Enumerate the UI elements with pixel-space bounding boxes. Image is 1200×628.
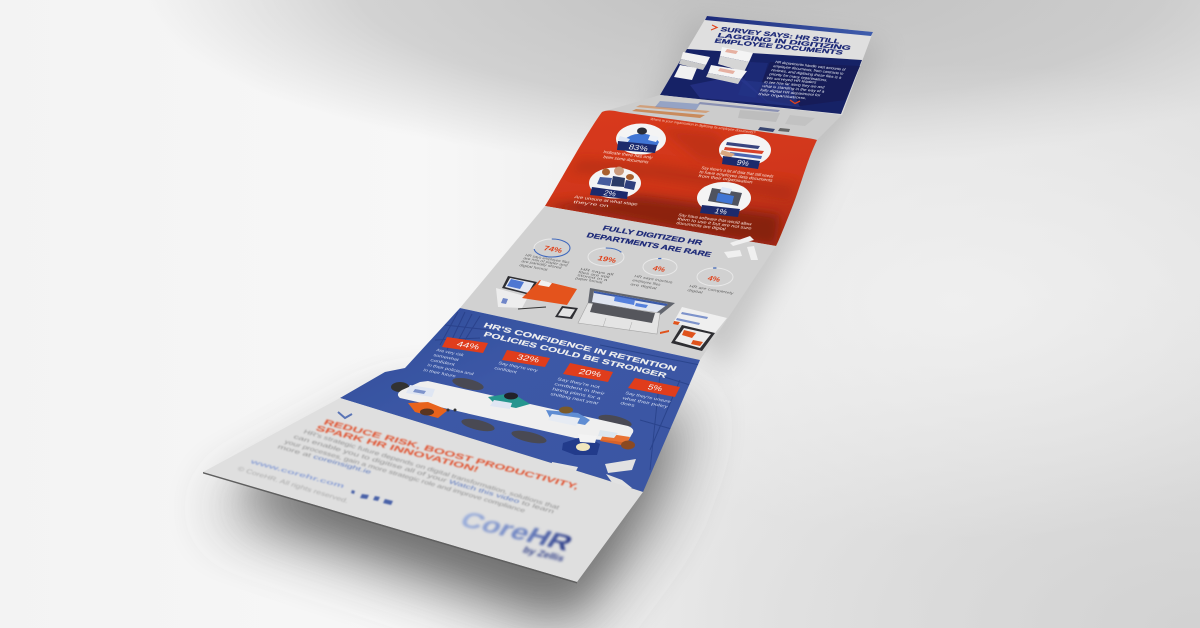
- icon: paper stacks: [674, 47, 753, 84]
- heading: POLICIES COULD BE STRONGER: [482, 331, 668, 380]
- heading: FULLY DIGITIZED HR: [601, 225, 703, 247]
- stat: 83 percent: been some documents: [603, 154, 650, 164]
- stat: 1 percent: Say have software that would allow: [678, 212, 753, 226]
- paragraph text: reviews, and digitising these files is a: [771, 68, 842, 80]
- ring: 4 percent complete: 4%: [706, 275, 721, 284]
- panel: fold strip: [602, 95, 842, 140]
- body copy: your processes, gain a more strategic role and improve compliance: [283, 439, 526, 514]
- ring: 4 percent complete: digital: [687, 288, 704, 295]
- folded paper infographic: [203, 16, 873, 584]
- stat: 5 percent: what their policy: [622, 395, 669, 409]
- ring: 4 percent active: employee files: [632, 278, 662, 287]
- ring: 19 percent: stored in a: [577, 273, 609, 282]
- heading: HR'S CONFIDENCE IN RETENTION: [482, 322, 678, 373]
- paragraph text: fully digital HR department for: [760, 88, 822, 97]
- panel: header: [660, 16, 873, 115]
- stat: 83 percent: 83%: [627, 142, 650, 153]
- ring: 4 percent active: 4%: [651, 265, 666, 274]
- person: blue shirt: [546, 406, 590, 426]
- panel: retention confidence: [340, 308, 700, 492]
- paragraph text: HR departments handle vast amounts of: [775, 60, 846, 72]
- ring: 19 percent: HR says all: [580, 267, 615, 277]
- stat: 5 percent: 5%: [646, 382, 665, 393]
- stat: 1 percent: [676, 182, 754, 231]
- stat: 83 percent: Indicate there has only: [603, 149, 655, 160]
- call to action heading: REDUCE RISK, BOOST PRODUCTIVITY,: [322, 418, 581, 491]
- ring: 19 percent: 19%: [596, 255, 617, 265]
- person: navy foreground: [562, 430, 635, 455]
- body copy: HR's strategic future depends on digital transformation, solutions that: [302, 429, 561, 511]
- paragraph text: We surveyed HR leaders: [766, 76, 817, 84]
- stat: 20 percent: [550, 363, 613, 406]
- stat: 1 percent: 1%: [713, 206, 729, 216]
- stat: 1 percent: them to use it but are not sure: [677, 216, 754, 231]
- paper shadow: [215, 20, 885, 628]
- paragraph text: to see how far along they are and: [764, 80, 825, 89]
- panel: red statistics: [540, 110, 817, 246]
- paragraph text: priority for many organisations.: [769, 72, 828, 82]
- logo: CoreHR: [455, 507, 578, 555]
- stat: 44 percent: somewhat: [433, 352, 461, 362]
- stat: 5 percent: [620, 378, 680, 409]
- stat: 9 percent: 9%: [735, 158, 751, 168]
- logo: by Zellis: [521, 545, 567, 563]
- stat: 1 percent: documents are digital: [676, 220, 727, 231]
- person: teal: [488, 392, 530, 409]
- ring: 19 percent: [575, 248, 624, 285]
- stat: 44 percent: [423, 337, 488, 379]
- title: LAGGING IN DIGITIZING: [716, 32, 852, 52]
- stat: 20 percent: 20%: [577, 367, 604, 379]
- call to action heading: SPARK HR INNOVATION!: [314, 424, 481, 474]
- ring: 74 percent: HR says employee files: [525, 253, 571, 264]
- ring: 19 percent: paper format: [575, 276, 603, 285]
- ring: 4 percent complete: HR are completely: [689, 284, 735, 295]
- icon: chevron down: [790, 100, 800, 104]
- body copy: more at coreinsight.ie: [276, 444, 372, 476]
- body copy: can enable you to digitise all of your Watch this video to learn: [292, 434, 555, 515]
- chevron: [711, 25, 717, 30]
- stat: 32 percent: confident: [494, 365, 519, 375]
- website and address: [236, 459, 350, 505]
- ring: 74 percent: are mix of paper and: [523, 256, 569, 267]
- stat: 44 percent: confident: [430, 357, 457, 367]
- stat: 44 percent: in their future: [423, 367, 458, 379]
- ring: 19 percent: files are still: [578, 270, 611, 279]
- paragraph text: what is standing in the way of a: [762, 84, 825, 94]
- stat: 5 percent: does: [620, 400, 636, 408]
- stat: 2 percent: Are unsure at what stage: [574, 194, 640, 207]
- stat: 20 percent: shifting next year: [550, 391, 601, 406]
- icon: loose papers: [724, 236, 758, 260]
- stat: 83 percent: [603, 124, 666, 164]
- stat: 32 percent: 32%: [515, 352, 542, 364]
- person: orange: [406, 385, 456, 418]
- title: EMPLOYEE DOCUMENTS: [713, 38, 844, 57]
- ring: 74 percent: [519, 239, 571, 272]
- stat: 20 percent: Say they're not: [557, 376, 602, 390]
- stat: 9 percent: from their organisation: [698, 173, 755, 185]
- icon: check chevron: [338, 412, 352, 418]
- icon: loose papers lower: [550, 459, 636, 488]
- icon: phone: [555, 306, 578, 319]
- website and address: www.corehr.com: [247, 459, 345, 490]
- ring: 74 percent: are partially stored: [521, 259, 563, 270]
- website and address: © CoreHR. All rights reserved.: [236, 465, 350, 505]
- paragraph text: employee documents, from contracts to: [773, 64, 844, 76]
- ring: 4 percent complete: [687, 268, 735, 295]
- logo: [455, 507, 578, 563]
- stat: 44 percent: Are very risk: [436, 347, 465, 357]
- stat: 44 percent: in their policies and: [427, 362, 475, 376]
- ring: 4 percent active: [630, 258, 677, 290]
- panel: navy document image: [660, 47, 862, 114]
- call to action heading: [314, 418, 581, 491]
- stat: 9 percent: [698, 134, 775, 185]
- ring: 74 percent: 74%: [542, 245, 563, 255]
- title: [713, 26, 852, 57]
- stat: 20 percent: hiring plans for a: [552, 386, 603, 401]
- ring: 4 percent active: HR says inactive: [634, 274, 674, 284]
- stat: 2 percent: they're on: [573, 199, 611, 208]
- stat: 5 percent: Say they're unsure: [625, 390, 673, 404]
- stat: 9 percent: to have employee data documents: [699, 169, 774, 183]
- stat: 2 percent: [573, 166, 641, 208]
- stat: 2 percent: 2%: [602, 188, 618, 198]
- paragraph text: [758, 60, 846, 100]
- top bar: [705, 16, 873, 36]
- ring: 74 percent: digital format: [519, 263, 548, 272]
- stat: 32 percent: Say they're very: [498, 360, 539, 373]
- icon: forms and clipboard tablet: [660, 307, 727, 351]
- red photo shading: [540, 128, 795, 246]
- illustration: meeting table: [391, 376, 635, 455]
- stat: 9 percent: Say there's a lot of data that still needs: [701, 165, 775, 179]
- heading: [482, 322, 678, 380]
- icon: tablet, folder and papers: [496, 276, 577, 309]
- decorative beams: [435, 312, 700, 470]
- stat: 44 percent: 44%: [455, 339, 482, 351]
- fold caption: Where is your organisation in digitising its employee documents?: [650, 117, 756, 135]
- heading: DEPARTMENTS ARE RARE: [585, 232, 713, 259]
- panel: digitized departments: [460, 206, 776, 360]
- title: SURVEY SAYS: HR STILL: [719, 26, 841, 45]
- stat: 20 percent: confident in their: [554, 381, 607, 396]
- paragraph text: their organisations.: [758, 92, 807, 100]
- social icons: [351, 490, 393, 505]
- panel: footer: [203, 398, 643, 584]
- stat: 32 percent: [494, 350, 550, 375]
- ring: 4 percent active: are digital: [630, 282, 658, 290]
- icon: laptop: [578, 288, 675, 334]
- heading: [585, 225, 713, 259]
